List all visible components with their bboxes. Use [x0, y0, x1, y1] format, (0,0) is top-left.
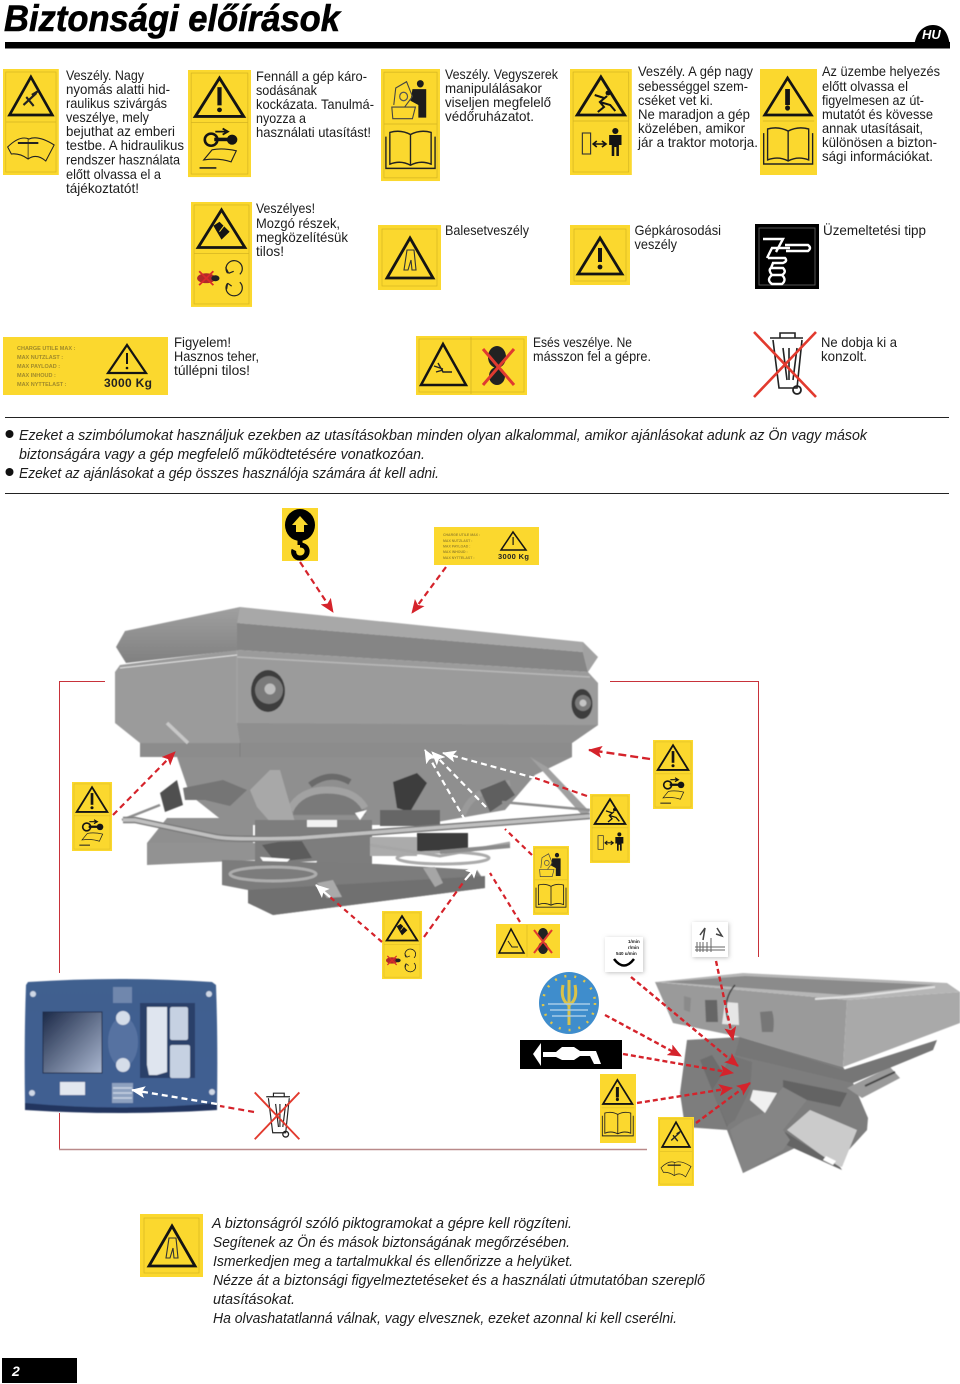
bullet text block: Ezeket az ajánlásokat a gép összes használója számára át kell adni. [19, 465, 439, 482]
icon: hydraulic small [658, 1117, 694, 1186]
left hopper sight glass [251, 670, 285, 712]
lower left arm [700, 1055, 740, 1127]
second spreader photo [655, 973, 960, 1173]
text: thrown parts [637, 64, 758, 150]
mechanism underside [177, 757, 572, 825]
text: machine damage [256, 69, 374, 140]
text: do not discard: Ne dobja ki a [821, 335, 897, 350]
closing text block: Ismerkedjen meg a tartalmukkal és ellenőrizze a helyüket. [213, 1253, 573, 1270]
text: read manual: különösen a bizton- [822, 135, 937, 150]
icon: machine damage hazard [570, 225, 630, 285]
left side bracket [160, 780, 183, 812]
hopper left face [655, 982, 847, 1067]
bullet text block [6, 426, 868, 482]
label: rotation speed white [605, 937, 643, 972]
icon: thrown parts small [590, 794, 630, 863]
text: machine damage: használati utasítást! [256, 125, 371, 140]
icon: fall hazard [416, 336, 527, 395]
text: thrown parts: Veszély. A gép nagy [638, 64, 753, 79]
text: read manual: annak utasításait, [822, 121, 923, 136]
label: white pictogram [692, 922, 728, 957]
closing text block [211, 1215, 706, 1327]
icon: read manual [760, 69, 817, 175]
text: read manual: sági információkat. [822, 149, 933, 164]
text: thrown parts: Ne maradjon a gép [638, 107, 750, 122]
icon: moving parts small [382, 911, 422, 979]
arrow: thrown parts icon to hopper [443, 753, 587, 796]
label: max payload: MAX NYTTELAST : [17, 382, 67, 388]
closing text block: Nézze át a biztonsági figyelmeztetéseket és a használati útmutatóban szereplő [213, 1272, 706, 1289]
label: max payload [3, 337, 168, 395]
label: max payload: MAX NUTZLAST : [17, 355, 63, 361]
arrow: moving parts right [424, 865, 478, 937]
text: thrown parts: jár a traktor motorja. [637, 135, 758, 150]
text: machine damage hazard: Gépkárosodási [634, 223, 721, 238]
text: moving parts: Mozgó részek, [256, 216, 340, 231]
arrow: white pictogram [716, 961, 733, 1040]
tube rail [123, 816, 590, 839]
red frame [59, 682, 758, 1150]
hopper top opening [655, 973, 960, 1000]
text: chemicals: Veszély. Vegyszerek [445, 67, 558, 82]
text: hydraulic leak warning: előtt olvassa el a [66, 167, 161, 182]
icon: fall hazard small [496, 924, 560, 958]
arrow: left icon to hopper [113, 752, 175, 815]
text: fall hazard: másszon fel a gépre. [533, 349, 651, 364]
icon: chemicals small [533, 846, 569, 915]
icon: left key warning [72, 782, 112, 851]
right hopper sight glass [572, 689, 592, 719]
icon: read manual small [600, 1074, 636, 1143]
label: payload small: MAX NYTTELAST : [443, 556, 474, 560]
label: payload small [434, 527, 539, 565]
text: operating tip: Üzemeltetési tipp [823, 223, 926, 238]
text: read manual: figyelmesen az út- [822, 93, 924, 108]
EU stickers disc [539, 972, 599, 1034]
text: hydraulic leak warning: nyomás alatti hid- [66, 82, 170, 97]
centre assembly [255, 820, 372, 864]
label: max payload: MAX INHOUD : [17, 373, 56, 379]
language tab label: HU [922, 27, 941, 42]
hopper body [115, 650, 598, 743]
dark chute [393, 773, 427, 812]
icon: moving parts [191, 202, 252, 307]
label: payload small: MAX PAYLOAD : [443, 544, 470, 548]
text: moving parts: Veszélyes! [256, 201, 315, 216]
arrow: rotation label [631, 977, 738, 1066]
text: machine damage hazard: veszély [634, 237, 677, 252]
text: read manual: Az üzembe helyezés [822, 64, 940, 79]
icon: do not discard console [754, 332, 816, 397]
text: thrown parts: sebességgel szem- [638, 79, 748, 94]
bullet text block: Ezeket a szimbólumokat használjuk ezekben az utasításokban minden olyan alkalommal, amikor ajánlásokat adunk az Ön vagy mások [19, 426, 868, 444]
text: payload warning [174, 335, 259, 378]
label: payload small: 3000 Kg [498, 552, 529, 561]
text: fall hazard: Esés veszélye. Ne [533, 335, 632, 350]
label: payload small: MAX INHOUD : [443, 550, 468, 554]
label: payload small: CHARGE UTILE MAX : [443, 533, 480, 537]
right side plate [847, 1067, 900, 1098]
arrow: hook to machine [300, 562, 333, 612]
label: max payload: 3000 Kg [104, 376, 152, 390]
back brackets [530, 757, 590, 815]
arrow: black label [623, 1054, 733, 1073]
text: machine damage: kockázata. Tanulmá- [256, 97, 374, 112]
lower plates [147, 818, 253, 845]
text: machine damage: nyozza a [256, 111, 306, 126]
white gaps [307, 820, 337, 827]
lower hopper band [140, 743, 572, 757]
icon: pointing hand tip [755, 224, 819, 289]
arrow: payload to machine [412, 567, 446, 613]
text: machine damage hazard [634, 223, 721, 252]
text: read manual: mutatót és kövesse [822, 107, 933, 122]
icon: chemicals protective clothing [381, 69, 440, 181]
closing text block: Ha olvashatatlanná válnak, vagy elvesznek, ezeket azonnal ki kell cserélni. [213, 1310, 677, 1327]
chute [787, 1110, 857, 1167]
text: chemicals: manipulálásakor [445, 81, 542, 96]
icon: hydraulic leak [3, 69, 59, 175]
arrow: hydraulic icon [696, 1083, 750, 1123]
label: rotation speed white: 540 u/min [616, 951, 637, 956]
arrow: right key icon to hopper [589, 750, 650, 759]
text: hydraulic leak warning: bejuthat az emberi [66, 124, 175, 139]
machine photo: spreader front [115, 607, 598, 915]
text: do not discard: konzolt. [821, 349, 867, 364]
text: hydraulic leak warning: rendszer használata [66, 152, 180, 168]
text: payload warning: túllépni tilos! [174, 363, 250, 378]
text: do not discard [821, 335, 897, 364]
label: rotation speed white: r/min [628, 945, 639, 950]
text: moving parts: tilos! [256, 244, 284, 259]
lid [116, 607, 240, 663]
page number: 2 [11, 1363, 20, 1379]
text: read manual [822, 64, 940, 164]
text: hydraulic leak warning: veszélye, mely [66, 110, 149, 125]
icon: thrown parts, keep distance [570, 69, 632, 175]
label: max payload: CHARGE UTILE MAX : [17, 346, 76, 352]
text: moving parts [256, 201, 348, 259]
icon: right key warning [653, 740, 693, 809]
text: hydraulic leak warning: tájékoztatót! [66, 181, 139, 196]
closing text block: Segítenek az Ön és mások biztonságának megőrzésében. [213, 1233, 570, 1251]
control console [25, 979, 217, 1113]
band under hopper [735, 1037, 937, 1083]
label: rotation speed white: 1/min [628, 939, 640, 944]
text: chemicals: védőruházatot. [445, 109, 534, 124]
text: chemicals: viseljen megfelelő [445, 95, 551, 110]
text: accident hazard: Balesetveszély [445, 223, 529, 238]
tray [222, 860, 485, 915]
text: fall hazard [533, 335, 651, 364]
page number [2, 1358, 77, 1383]
text: chemicals [445, 67, 558, 124]
icon: accident hazard [378, 225, 441, 290]
text: hydraulic leak warning: raulikus szivárgás [66, 96, 167, 111]
text: thrown parts: cséket vet ki. [638, 93, 713, 108]
label: max payload: MAX PAYLOAD : [17, 364, 60, 370]
closing text block: utasításokat. [213, 1291, 295, 1308]
icon: no trash small [255, 1092, 299, 1139]
strap [250, 770, 303, 850]
arrow: EU disc [605, 1015, 681, 1056]
central wedge [712, 1055, 752, 1125]
arrow: chemicals icon to hopper [425, 750, 532, 855]
header bar with language tab [5, 25, 950, 48]
text: hydraulic leak warning: Veszély. Nagy [66, 68, 144, 83]
text: payload warning: Figyelem! [174, 335, 231, 350]
disc housings [293, 788, 366, 815]
hopper right face [843, 992, 960, 1067]
text: moving parts: megközelítésük [256, 230, 348, 245]
arrow: console to label [132, 1090, 254, 1112]
text: hydraulic leak warning: testbe. A hidraulikus [66, 138, 184, 153]
arrow: manual icon [637, 1088, 732, 1103]
text: thrown parts: közelében, amikor [638, 121, 745, 136]
text: hydraulic leak warning [66, 68, 184, 196]
text: read manual: előtt olvassa el [822, 79, 908, 94]
arrow: moving parts left [316, 885, 382, 942]
text: machine damage: sodásának [256, 83, 317, 98]
black label: lubrication gun [520, 1040, 622, 1069]
icon: machine damage and key [188, 70, 251, 177]
bullet text block: biztonságára vagy a gép megfelelő működtetésére vonatkozóan. [19, 446, 425, 463]
arrow: fall hazard to tray [490, 873, 520, 922]
label: payload small: MAX NUTZLAST : [443, 539, 472, 543]
console screen [43, 1012, 102, 1073]
spreader lower mass [680, 1037, 868, 1173]
icon: hook lifting point [282, 508, 318, 561]
central bracket [730, 1087, 807, 1173]
sockets [760, 1011, 774, 1032]
text: machine damage: Fennáll a gép káro- [256, 69, 367, 84]
text: payload warning: Hasznos teher, [174, 349, 259, 364]
closing text block: A biztonságról szóló piktogramokat a gépre kell rögzíteni. [211, 1215, 572, 1232]
safety pictogram icon [140, 1214, 203, 1277]
